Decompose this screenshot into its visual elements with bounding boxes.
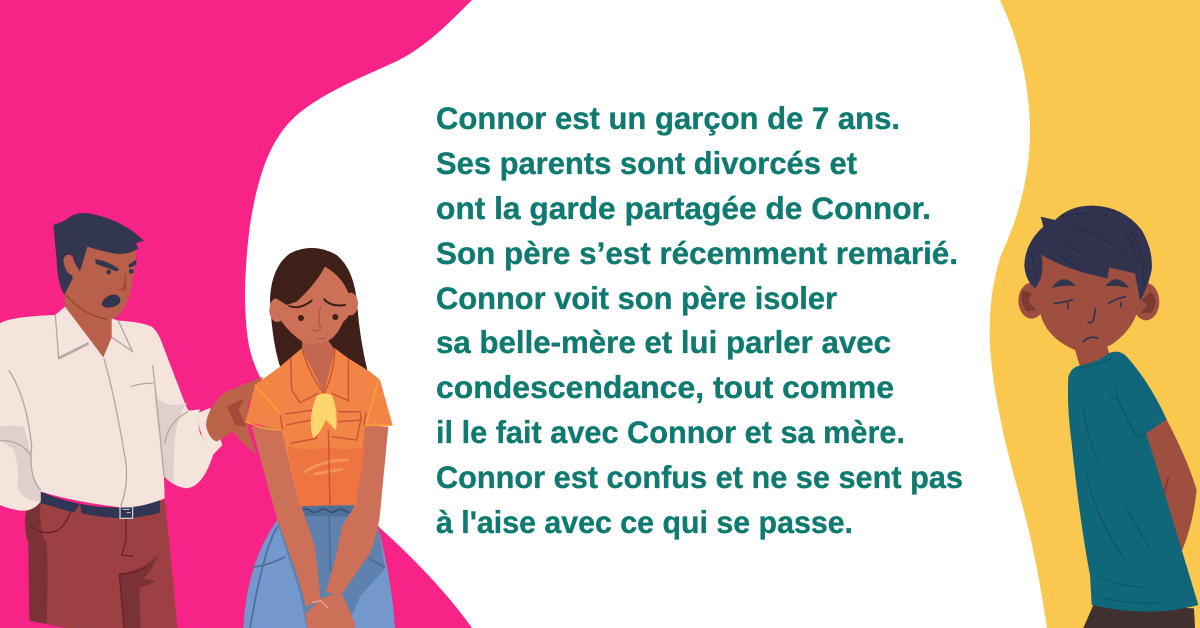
- man hair: [53, 213, 144, 295]
- text block: Connor's story: ont la garde partagée de Connor.: [436, 190, 931, 226]
- man eyebrows and eyes: [95, 259, 137, 274]
- woman ears: [269, 293, 358, 322]
- man neck and face: [65, 243, 136, 359]
- man nose: [117, 271, 127, 291]
- text block: Connor's story: [436, 100, 963, 540]
- man ear: [63, 255, 75, 276]
- woman face details: [276, 250, 348, 357]
- woman nose and mouth: [313, 307, 326, 339]
- text block: Connor's story: condescendance, tout comme: [436, 369, 894, 405]
- man trousers: [25, 500, 177, 628]
- boy face: [1037, 250, 1140, 351]
- woman character: [243, 248, 395, 628]
- boy neck: [1075, 347, 1110, 367]
- woman arms: [252, 425, 388, 628]
- boy ears: [1018, 283, 1159, 320]
- man character: [0, 213, 263, 628]
- background: pink shape: [0, 0, 472, 628]
- man belt: [39, 492, 160, 518]
- boy eyebrows: [1052, 279, 1129, 288]
- boy character: [1018, 206, 1198, 628]
- text block: Connor's story: Son père s’est récemment remarié.: [436, 235, 958, 271]
- text block: Connor's story: Ses parents sont divorcés et: [436, 145, 857, 181]
- text block: Connor's story: sa belle-mère et lui parler avec: [436, 324, 891, 360]
- woman neck and face: [275, 267, 352, 393]
- boy hair: [1024, 206, 1152, 301]
- text block: Connor's story: Connor est confus et ne se sent pas: [436, 459, 963, 495]
- text block: Connor's story: il le fait avec Connor et sa mère.: [436, 414, 905, 450]
- woman hair: [270, 248, 368, 372]
- woman jeans: [243, 505, 395, 628]
- man shirt: [0, 307, 222, 511]
- woman scarf: [311, 393, 337, 438]
- text block: Connor's story: à l'aise avec ce qui se passe.: [436, 504, 853, 540]
- boy elbow line: [1164, 477, 1168, 493]
- man hand: [206, 377, 263, 455]
- woman neck shadow: [302, 341, 335, 393]
- text block: Connor's story: Connor voit son père isoler: [436, 280, 837, 316]
- background: yellow shape: [990, 0, 1200, 628]
- woman eyes: [298, 314, 338, 321]
- boy trousers: [1083, 603, 1195, 628]
- woman shirt: [246, 348, 393, 506]
- man jaw line: [66, 295, 107, 319]
- boy arm: [1142, 413, 1197, 552]
- boy hair strands: [1032, 213, 1144, 285]
- boy eyes, nose and mouth: [1054, 297, 1125, 342]
- boy t-shirt: [1068, 352, 1198, 612]
- woman fringe: [272, 253, 325, 305]
- man open mouth: [102, 294, 120, 308]
- text block: Connor's story: Connor est un garçon de 7 ans.: [436, 100, 900, 136]
